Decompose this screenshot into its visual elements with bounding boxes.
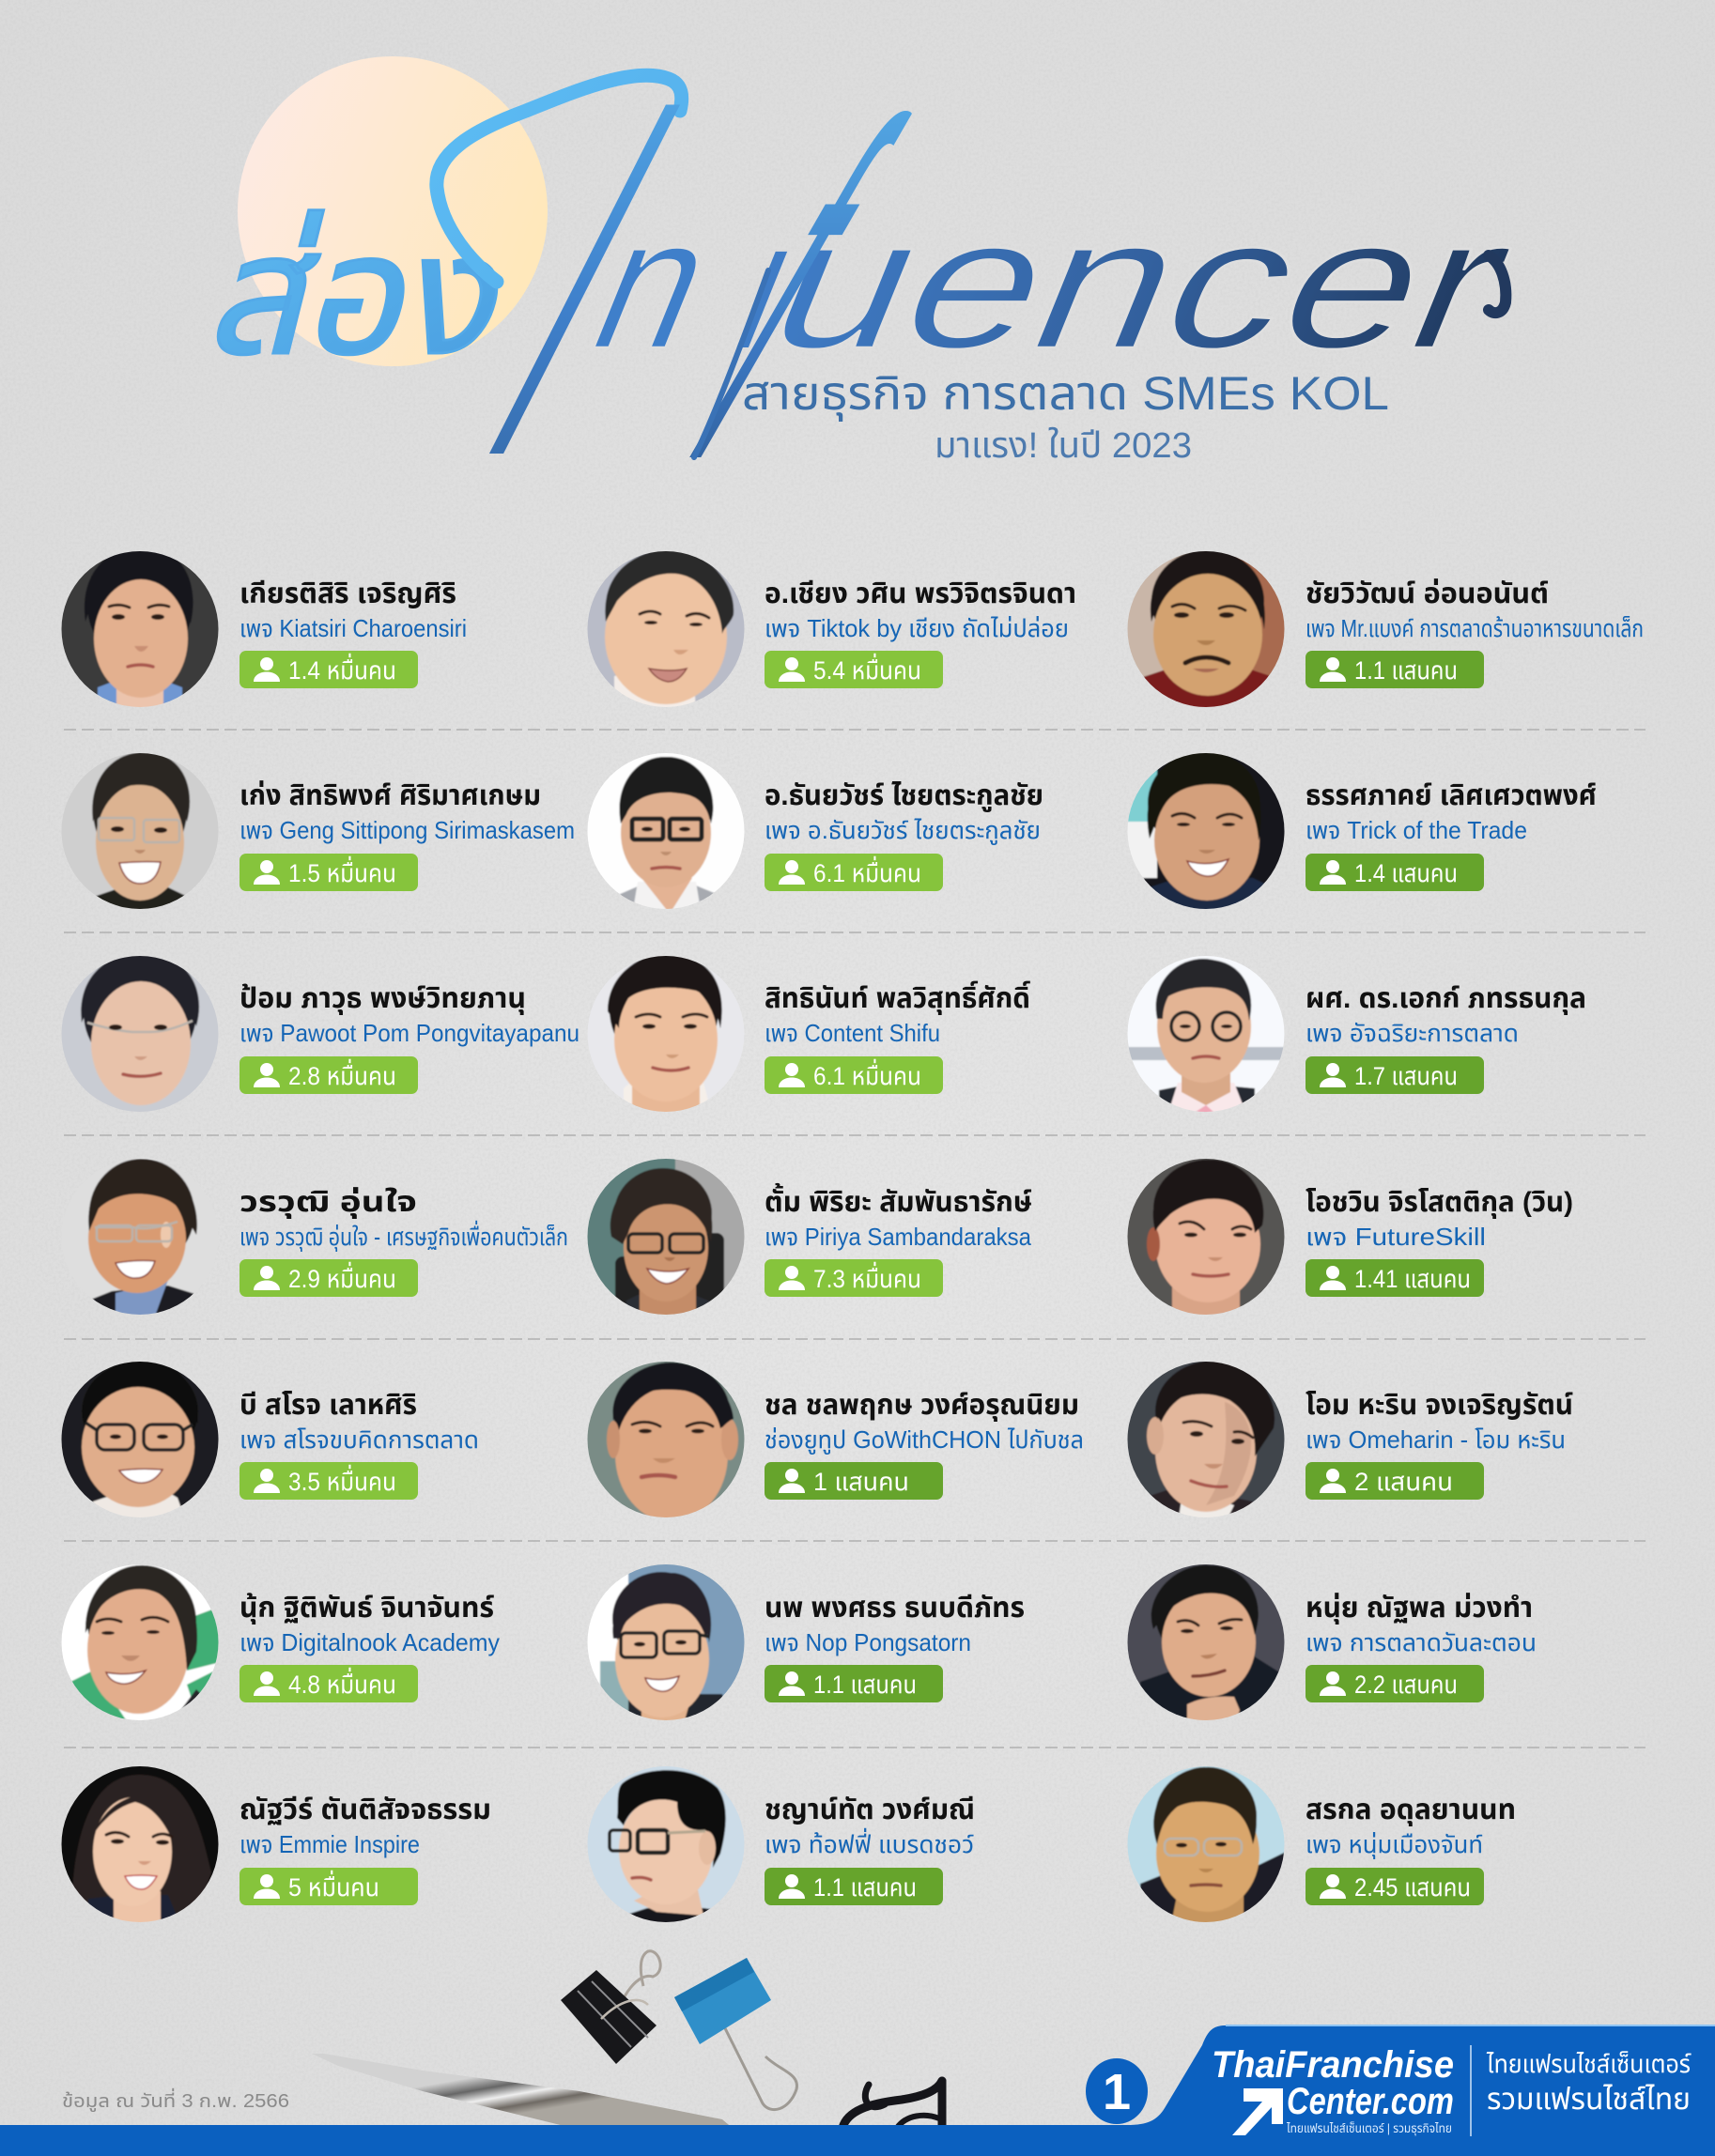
name: นพ พงศธร ธนบดีภัทร	[765, 1593, 1025, 1624]
followers badge: 1.1 แสนคน	[1354, 656, 1458, 685]
name: ธรรศภาคย์ เลิศเศวตพงศ์	[1306, 780, 1597, 811]
icon: logo arrow	[1232, 2088, 1283, 2135]
followers badge: 2.2 แสนคน	[1354, 1671, 1458, 1699]
followers badge: 1 แสนคน	[813, 1468, 909, 1496]
avatar	[62, 1362, 218, 1517]
name: ชญาน์ทัต วงศ์มณี	[765, 1794, 975, 1825]
card: โอม หะริน จงเจริญรัตน์	[1121, 1355, 1573, 1524]
page number badge	[1086, 2058, 1148, 2124]
card: บี สโรจ เลาหศิริ	[55, 1355, 479, 1524]
followers badge	[239, 1259, 418, 1297]
card: เก่ง สิทธิพงศ์ ศิริมาศเกษม	[55, 747, 575, 916]
avatar	[581, 1355, 750, 1524]
avatar	[62, 753, 218, 909]
card: สรกล อดุลยานนท	[1121, 1760, 1516, 1929]
avatar	[581, 1152, 750, 1321]
logo: ThaiFranchise Center.com: Center.com	[1287, 2081, 1454, 2122]
followers badge	[1306, 854, 1484, 891]
page: เพจ Content Shifu	[765, 1019, 940, 1047]
followers badge	[1306, 1868, 1484, 1905]
title: Influencer (letters placed individually)	[421, 0, 1542, 562]
name: หนุ่ย ณัฐพล ม่วงทำ	[1306, 1593, 1533, 1625]
followers badge	[1306, 1056, 1484, 1094]
pen	[312, 2054, 734, 2130]
card: ป้อม ภาวุธ พงษ์วิทยภานุ	[55, 949, 579, 1118]
page: เพจ การตลาดวันละตอน	[1306, 1628, 1537, 1656]
page: เพจ สโรจขบคิดการตลาด	[239, 1425, 479, 1454]
page: เพจ Tiktok by เชียง ถัดไม่ปล่อย	[765, 614, 1069, 642]
name: โอม หะริน จงเจริญรัตน์	[1306, 1390, 1573, 1421]
page: เพจ Kiatsiri Charoensiri	[239, 614, 467, 642]
card: เกียรติสิริ เจริญศิริ	[55, 545, 467, 714]
card: ธรรศภาคย์ เลิศเศวตพงศ์	[1121, 747, 1597, 916]
card: ผศ. ดร.เอกก์ ภทรธนกุล	[1121, 949, 1586, 1118]
card: สิทธินันท์ พลวิสุทธิ์ศักดิ์	[581, 949, 1031, 1118]
avatar	[1121, 1558, 1290, 1727]
followers badge	[1306, 1462, 1484, 1500]
name: บี สโรจ เลาหศิริ	[239, 1390, 417, 1421]
followers badge	[1306, 1665, 1484, 1702]
followers badge: 6.1 หมื่นคน	[813, 1058, 921, 1090]
page: เพจ ท้อฟฟี่ แบรดชอว์	[765, 1827, 974, 1858]
card: โอชวิน จิรโสตติกุล (วิน)	[1121, 1152, 1573, 1321]
avatar	[1121, 747, 1290, 916]
avatar	[581, 1558, 750, 1727]
followers badge: 2.9 หมื่นคน	[288, 1261, 396, 1293]
avatar	[581, 545, 750, 714]
followers badge	[765, 1665, 943, 1702]
avatar	[62, 1564, 218, 1720]
avatar	[581, 949, 750, 1118]
followers badge: 1.1 แสนคน	[813, 1873, 917, 1902]
card: ชญาน์ทัต วงศ์มณี	[581, 1760, 975, 1929]
name: ผศ. ดร.เอกก์ ภทรธนกุล	[1306, 983, 1586, 1015]
title flourish of the I	[437, 75, 682, 282]
followers badge	[239, 1665, 418, 1702]
followers badge: 4.8 หมื่นคน	[288, 1667, 396, 1699]
card: นุ้ก ฐิติพันธ์ จินาจันทร์	[55, 1558, 500, 1727]
subtitle: สายธุรกิจ การตลาด SMEs KOL	[742, 367, 1389, 422]
name: สรกล อดุลยานนท	[1306, 1794, 1516, 1826]
followers badge: 2.8 หมื่นคน	[288, 1058, 396, 1090]
blue binder clip	[674, 1958, 796, 2110]
title: Influencer (letters placed individually): I	[421, 0, 749, 562]
followers badge: 2.45 แสนคน	[1354, 1873, 1471, 1902]
followers badge	[239, 1462, 418, 1500]
name: อ.ธันยวัชร์ ไชยตระกูลชัย	[765, 780, 1043, 812]
name: เกียรติสิริ เจริญศิริ	[239, 578, 456, 609]
followers badge: 1.4 หมื่นคน	[288, 653, 396, 685]
card: วรวุฒิ อุ่นใจ	[87, 1159, 567, 1315]
page: เพจ Trick of the Trade	[1306, 816, 1527, 844]
logo: ThaiFranchise Center.com: ThaiFranchise	[1212, 2044, 1454, 2086]
card: ชล ชลพฤกษ วงศ์อรุณนิยม	[581, 1355, 1084, 1524]
followers badge	[765, 1056, 943, 1094]
card: อ.เชียง วศิน พรวิจิตรจินดา	[581, 545, 1076, 714]
page: เพจ Geng Sittipong Sirimaskasem	[239, 816, 575, 844]
black binder clip	[561, 1951, 660, 2064]
name: ตั้ม พิริยะ สัมพันธารักษ์	[765, 1182, 1032, 1218]
name: นุ้ก ฐิติพันธ์ จินาจันทร์	[239, 1593, 494, 1625]
avatar	[62, 956, 218, 1112]
followers badge	[1306, 651, 1484, 688]
card: อ.ธันยวัชร์ ไชยตระกูลชัย	[581, 747, 1043, 916]
name: วรวุฒิ อุ่นใจ	[239, 1187, 417, 1219]
data source note: ข้อมูล ณ วันที่ 3 ก.พ. 2566	[62, 2087, 289, 2113]
avatar	[581, 747, 750, 916]
glasses	[842, 2081, 942, 2128]
followers badge: 1.41 แสนคน	[1354, 1265, 1471, 1293]
page: เพจ อ.ธันยวัชร์ ไชยตระกูลชัย	[765, 816, 1041, 845]
footer band: รวมแฟรนไชส์ไทย	[1487, 2082, 1691, 2116]
followers badge	[239, 854, 418, 891]
name: ชล ชลพฤกษ วงศ์อรุณนิยม	[765, 1390, 1079, 1422]
name: สิทธินันท์ พลวิสุทธิ์ศักดิ์	[765, 980, 1031, 1015]
followers badge: 7.3 หมื่นคน	[813, 1261, 921, 1293]
sun circle behind title	[238, 56, 548, 366]
avatar	[1121, 545, 1290, 714]
avatar	[87, 1159, 198, 1315]
title: Influencer (letters placed individually): l	[717, 228, 806, 377]
title block	[195, 0, 1542, 562]
followers badge	[765, 1462, 943, 1500]
followers badge	[765, 651, 943, 688]
followers badge	[239, 1868, 418, 1905]
page: เพจ Emmie Inspire	[239, 1830, 420, 1858]
illustration: desk items	[312, 1951, 942, 2130]
page: เพจ Mr.แบงค์ การตลาดร้านอาหารขนาดเล็ก	[1306, 614, 1644, 642]
page number badge: 1	[1103, 2064, 1131, 2120]
followers badge: 1.5 หมื่นคน	[288, 855, 396, 887]
footer band	[0, 2025, 1715, 2156]
subtitle: year: มาแรง! ในปี 2023	[935, 426, 1192, 466]
followers badge: 1.4 แสนคน	[1354, 859, 1458, 887]
followers badge: 3.5 หมื่นคน	[288, 1464, 396, 1496]
followers badge: 5 หมื่นคน	[288, 1870, 379, 1902]
name: ณัฐวีร์ ตันติสัจจธรรม	[239, 1794, 491, 1825]
logo: ThaiFranchise Center.com	[1212, 2044, 1454, 2135]
title: Influencer (letters placed individually): n	[566, 179, 744, 387]
card: ชัยวิวัฒน์ อ่อนอนันต์	[1121, 545, 1644, 714]
card: หนุ่ย ณัฐพล ม่วงทำ	[1121, 1558, 1537, 1727]
followers badge	[239, 651, 418, 688]
page: เพจ Pawoot Pom Pongvitayapanu	[239, 1019, 579, 1047]
page: เพจ Omeharin - โอม หะริน	[1306, 1425, 1566, 1454]
page: เพจ FutureSkill	[1306, 1223, 1486, 1251]
card: ณัฐวีร์ ตันติสัจจธรรม	[55, 1760, 491, 1929]
title: Influencer (letters placed individually): uencer	[743, 179, 1542, 387]
tagline: ไทยแฟรนไชส์เซ็นเตอร์	[1486, 2050, 1692, 2078]
page: เพจ วรวุฒิ อุ่นใจ - เศรษฐกิจเพื่อคนตัวเล็ก	[239, 1220, 568, 1252]
logo: ThaiFranchise Center.com: ไทยแฟรนไชส์เซ็นเตอร์ | รวมธุรกิจไทย	[1286, 2121, 1452, 2135]
title: ส่อง: ส่อง	[195, 201, 530, 389]
avatar	[62, 1766, 218, 1922]
followers badge	[765, 1259, 943, 1297]
page: ช่องยูทูป GoWithCHON ไปกับชล	[765, 1425, 1084, 1455]
avatar	[1121, 1355, 1290, 1524]
followers badge: 6.1 หมื่นคน	[813, 855, 921, 887]
name: อ.เชียง วศิน พรวิจิตรจินดา	[765, 578, 1076, 609]
followers badge: 1.1 แสนคน	[813, 1671, 917, 1699]
page: เพจ Digitalnook Academy	[239, 1628, 500, 1656]
name: ป้อม ภาวุธ พงษ์วิทยภานุ	[239, 983, 526, 1015]
page: เพจ Piriya Sambandaraksa	[765, 1223, 1031, 1251]
followers badge: 2 แสนคน	[1354, 1468, 1453, 1496]
followers badge	[1306, 1259, 1484, 1297]
avatar	[62, 551, 218, 707]
followers badge: 1.7 แสนคน	[1354, 1062, 1458, 1090]
followers badge	[239, 1056, 418, 1094]
name: โอชวิน จิรโสตติกุล (วิน)	[1306, 1187, 1573, 1219]
title: Influencer (letters placed individually): f	[620, 23, 964, 560]
page: เพจ อัจฉริยะการตลาด	[1306, 1019, 1519, 1047]
name: ชัยวิวัฒน์ อ่อนอนันต์	[1306, 578, 1549, 609]
page: เพจ หนุ่มเมืองจันท์	[1306, 1830, 1483, 1859]
avatar	[581, 1760, 750, 1929]
avatar	[1121, 1760, 1290, 1929]
followers badge: 5.4 หมื่นคน	[813, 653, 921, 685]
avatar	[1121, 1152, 1290, 1321]
followers badge	[765, 1868, 943, 1905]
card: นพ พงศธร ธนบดีภัทร	[581, 1558, 1025, 1727]
card: ตั้ม พิริยะ สัมพันธารักษ์	[581, 1152, 1032, 1321]
page: เพจ Nop Pongsatorn	[765, 1628, 971, 1656]
followers badge	[765, 854, 943, 891]
avatar	[1121, 949, 1290, 1118]
name: เก่ง สิทธิพงศ์ ศิริมาศเกษม	[239, 780, 541, 811]
